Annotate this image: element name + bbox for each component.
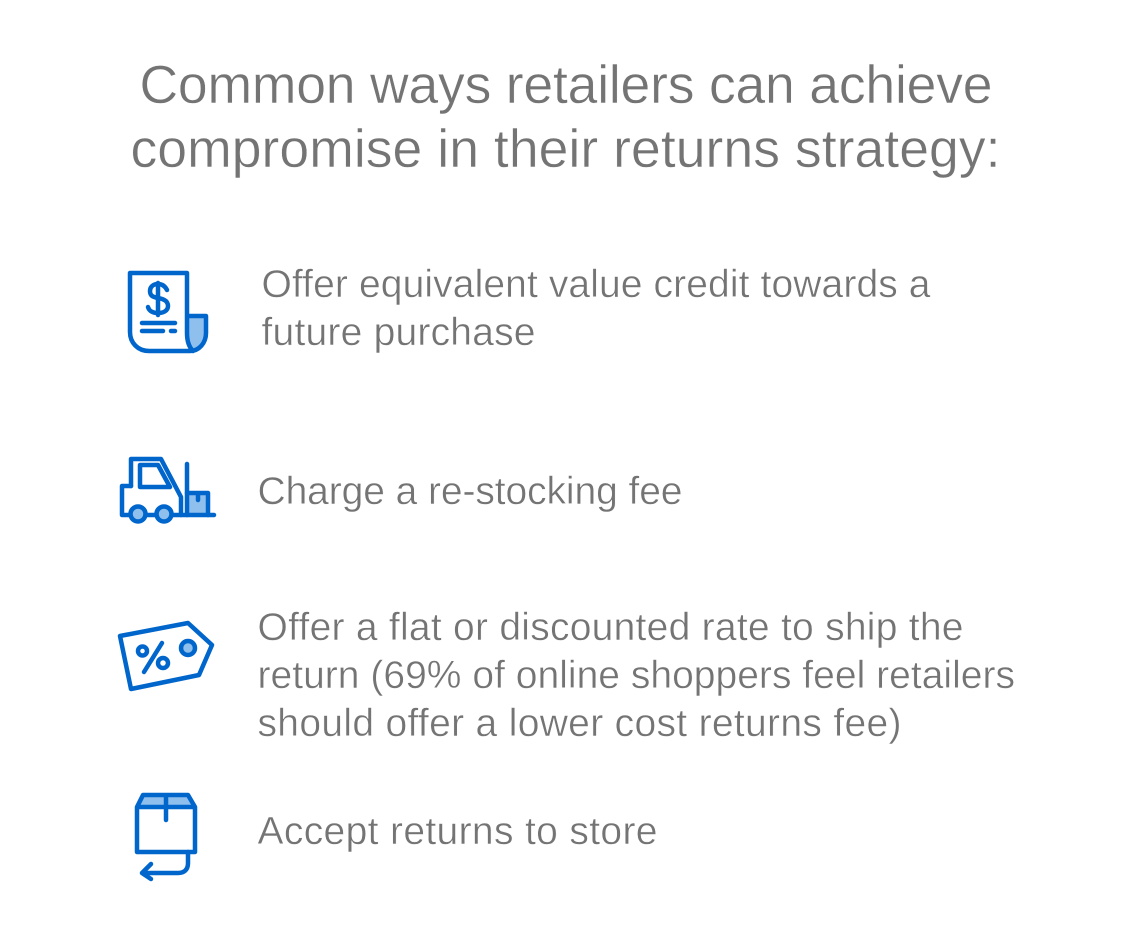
icon: receipt with dollar sign — [130, 273, 206, 351]
title: compromise in their returns strategy: — [130, 120, 1000, 179]
text: equivalent value credit: Offer equivalent value credit towards a — [262, 263, 931, 306]
icon: box with return arrow — [137, 795, 195, 879]
text: re-stocking fee: Charge a re-stocking fee — [258, 470, 682, 513]
text: flat or discounted rate — [258, 606, 1015, 745]
text: equivalent value credit — [262, 263, 931, 354]
title — [130, 56, 1000, 179]
title: Common ways retailers can achieve — [140, 56, 992, 115]
icon: forklift with box — [122, 459, 214, 522]
icon: percent price tag — [120, 623, 212, 689]
text: returns to store: Accept returns to store — [258, 810, 658, 853]
text: equivalent value credit: future purchase — [262, 311, 536, 354]
text: flat or discounted rate: should offer a lower cost returns fee) — [258, 702, 902, 745]
text: flat or discounted rate: return (69% of online shoppers feel retailers — [258, 654, 1015, 697]
text: flat or discounted rate: Offer a flat or discounted rate to ship the — [258, 606, 964, 649]
